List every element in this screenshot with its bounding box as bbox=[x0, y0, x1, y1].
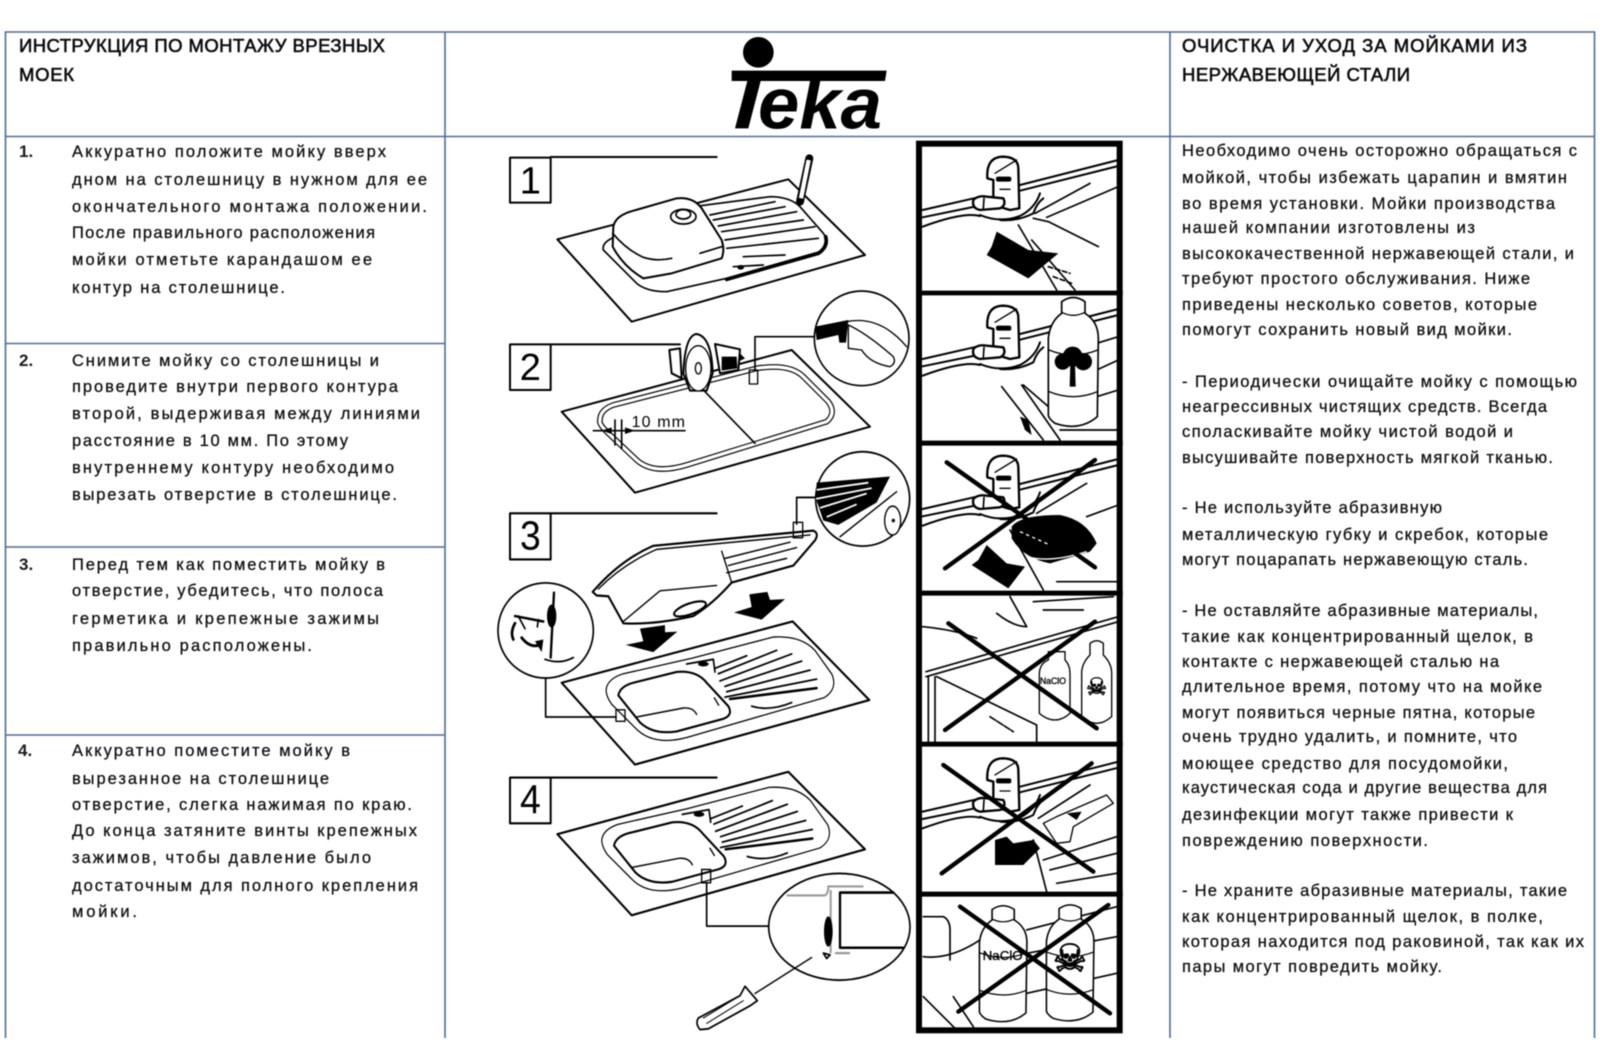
step number box 4: 4 bbox=[520, 778, 541, 823]
heading: cleaning and care bbox=[1182, 35, 1527, 85]
care text: regular cleaning: неагрессивных чистящих средств. Всегда bbox=[1182, 398, 1548, 416]
care text: do not leave abrasive materials: повреждению поверхности. bbox=[1182, 832, 1428, 850]
arrows pointing down bbox=[626, 592, 785, 652]
heading: installation instructions: ИНСТРУКЦИЯ ПО МОНТАЖУ ВРЕЗНЫХ bbox=[19, 35, 385, 56]
detail circle: drainer edge bbox=[793, 452, 910, 546]
step 2 text: проведите внутри первого контура bbox=[72, 378, 399, 396]
step 2 text: расстояние в 10 мм. По этому bbox=[72, 432, 349, 450]
step 3 text: Перед тем как поместить мойку в bbox=[72, 556, 385, 574]
step 1 text: После правильного расположения bbox=[72, 224, 375, 242]
care text: introduction: приведены несколько советов, которые bbox=[1182, 296, 1537, 314]
illustration: step 2 cutting bbox=[510, 291, 909, 493]
step 4 text: зажимов, чтобы давление было bbox=[72, 849, 371, 867]
care text: storage bbox=[1182, 882, 1585, 976]
care text: regular cleaning bbox=[1182, 373, 1577, 467]
heading: cleaning and care: НЕРЖАВЕЮЩЕЙ СТАЛИ bbox=[1182, 64, 1410, 85]
care text: do not leave abrasive materials: контакте с нержавеющей сталью на bbox=[1182, 653, 1500, 671]
detail connector bbox=[702, 869, 769, 926]
care text: do not leave abrasive materials bbox=[1182, 602, 1547, 850]
step 4 text: 4. bbox=[18, 741, 32, 760]
step 4 text: Аккуратно поместите мойку в bbox=[72, 742, 350, 760]
step 1 text: Аккуратно положите мойку вверх bbox=[72, 143, 387, 161]
icon: pencil bbox=[800, 158, 809, 202]
step number box 2 bbox=[510, 344, 680, 390]
detail ellipse: clamp section bbox=[769, 873, 910, 980]
step 1 text: мойки отметьте карандашом ее bbox=[72, 251, 372, 269]
step number box 3: 3 bbox=[520, 514, 541, 559]
panel 1: wipe with cloth bbox=[916, 157, 1123, 295]
step number box 2: 2 bbox=[520, 346, 541, 389]
care text: no abrasive sponge: металлическую губку и скребок, которые bbox=[1182, 526, 1548, 544]
step number box 3 bbox=[510, 513, 717, 559]
detail connector bbox=[749, 337, 813, 384]
care text: no abrasive sponge bbox=[1182, 499, 1548, 569]
detail circle: clamp bbox=[498, 583, 625, 721]
step 4 text: вырезанное на столешнице bbox=[72, 770, 329, 788]
care text: introduction: помогут сохранить новый вид мойки. bbox=[1182, 321, 1512, 339]
care text: no abrasive sponge: - Не используйте абразивную bbox=[1182, 499, 1442, 517]
step 2 text bbox=[19, 351, 420, 504]
logo: Teka: eka bbox=[758, 63, 882, 144]
care text: regular cleaning: споласкивайте мойку чистой водой и bbox=[1182, 423, 1513, 441]
step 3 text: правильно расположены. bbox=[72, 637, 312, 655]
heading: installation instructions bbox=[19, 35, 385, 85]
panel strip: care do and don't bbox=[916, 144, 1123, 1030]
care text: do not leave abrasive materials: длительное время, потому что на мойке bbox=[1182, 678, 1542, 696]
worktop with installed sink bbox=[557, 772, 865, 915]
step 3 text: 3. bbox=[19, 555, 33, 574]
worktop and upturned sink bbox=[557, 179, 865, 322]
panel 2: mild detergent bottle bbox=[916, 297, 1123, 446]
step 3 text: отверстие, убедитесь, что полоса bbox=[72, 582, 384, 600]
illustration: step 1 marking outline bbox=[510, 157, 865, 322]
10 mm dimension: 10 mm bbox=[632, 414, 685, 431]
panel 4: no chemicals under sink: ☠ bbox=[1086, 673, 1107, 701]
panel 3: no scouring pad bbox=[916, 456, 1123, 596]
panel 5: no metal scraper bbox=[916, 758, 1123, 897]
worktop with double outline bbox=[562, 350, 870, 493]
care text: storage: - Не храните абразивные материалы, такие bbox=[1182, 882, 1567, 900]
care text: introduction bbox=[1182, 142, 1577, 339]
step number box 1: 1 bbox=[520, 160, 541, 203]
step 2 text: внутреннему контуру необходимо bbox=[72, 459, 394, 477]
illustration: step 4 tightening bbox=[510, 772, 910, 1030]
detail circle: scraper bbox=[814, 291, 909, 386]
care text: regular cleaning: - Периодически очищайте мойку с помощью bbox=[1182, 373, 1577, 391]
step 2 text: Снимите мойку со столешницы и bbox=[72, 352, 379, 370]
care text: do not leave abrasive materials: такие как концентрированный щелок, в bbox=[1182, 628, 1533, 646]
step 4 text: До конца затяните винты крепежных bbox=[72, 822, 418, 840]
icon: screwdriver bbox=[697, 957, 812, 1030]
step 4 text bbox=[18, 741, 418, 921]
step 4 text: достаточным для полного крепления bbox=[72, 877, 418, 895]
panel 4: no chemicals under sink bbox=[916, 597, 1123, 747]
illustration: step 3 fitting bbox=[498, 452, 910, 765]
care text: introduction: нашей компании изготовлены из bbox=[1182, 219, 1475, 237]
10 mm dimension bbox=[593, 414, 685, 448]
step 1 text: контур на столешнице. bbox=[72, 279, 285, 297]
care text: introduction: требуют простого обслуживания. Ниже bbox=[1182, 270, 1530, 288]
care text: do not leave abrasive materials: дезинфекции могут также привести к bbox=[1182, 806, 1514, 824]
panel 6: no storing chemicals: ☠ bbox=[1053, 937, 1087, 982]
strip frame bbox=[919, 144, 1120, 1030]
worktop with cut-out sink position bbox=[562, 621, 869, 765]
step 2 text: второй, выдерживая между линиями bbox=[72, 405, 420, 423]
step 4 text: мойки. bbox=[72, 903, 137, 921]
care text: no abrasive sponge: могут поцарапать нержавеющую сталь. bbox=[1182, 551, 1528, 569]
panel 4: no chemicals under sink: NaClO bbox=[1040, 676, 1066, 686]
step 2 text: вырезать отверстие в столешнице. bbox=[72, 486, 397, 504]
care text: do not leave abrasive materials: моющее средство для посудомойки, bbox=[1182, 755, 1508, 773]
step 1 text: дном на столешницу в нужном для ее bbox=[72, 171, 427, 189]
care text: do not leave abrasive materials: - Не оставляйте абразивные материалы, bbox=[1182, 602, 1538, 620]
step 4 text: отверстие, слегка нажимая по краю. bbox=[72, 796, 412, 814]
heading: cleaning and care: ОЧИСТКА И УХОД ЗА МОЙКАМИ ИЗ bbox=[1182, 35, 1527, 56]
step number box 1 bbox=[510, 157, 717, 203]
step 1 text bbox=[19, 142, 427, 297]
panel 6: no storing chemicals bbox=[923, 905, 1117, 1028]
care text: storage: как концентрированный щелок, в полке, bbox=[1182, 908, 1543, 926]
care text: do not leave abrasive materials: очень трудно удалить, и помните, что bbox=[1182, 728, 1517, 746]
step 2 text: 2. bbox=[19, 351, 33, 370]
care text: storage: которая находится под раковиной, так как их bbox=[1182, 933, 1585, 951]
care text: introduction: высококачественной нержавеющей стали, и bbox=[1182, 245, 1574, 263]
step 1 text: окончательного монтажа положении. bbox=[72, 198, 427, 216]
care text: introduction: мойкой, чтобы избежать царапин и вмятин bbox=[1182, 169, 1567, 187]
step 3 text: герметика и крепежные зажимы bbox=[72, 610, 379, 628]
heading: installation instructions: МОЕК bbox=[19, 64, 74, 85]
care text: introduction: во время установки. Мойки производства bbox=[1182, 195, 1556, 213]
tilted sink bbox=[593, 531, 817, 624]
icon: circular saw bbox=[669, 334, 745, 391]
care text: introduction: Необходимо очень осторожно обращаться с bbox=[1182, 142, 1577, 160]
logo: Teka bbox=[732, 37, 887, 144]
care text: regular cleaning: высушивайте поверхность мягкой тканью. bbox=[1182, 449, 1553, 467]
panel 6: no storing chemicals: NaClO bbox=[983, 948, 1023, 963]
care text: do not leave abrasive materials: могут появиться черные пятна, которые bbox=[1182, 704, 1535, 722]
care text: do not leave abrasive materials: каустическая сода и другие вещества для bbox=[1182, 779, 1547, 797]
step 3 text bbox=[19, 555, 385, 655]
step 1 text: 1. bbox=[19, 142, 33, 161]
step number box 4 bbox=[510, 778, 717, 823]
care text: storage: пары могут повредить мойку. bbox=[1182, 958, 1442, 976]
